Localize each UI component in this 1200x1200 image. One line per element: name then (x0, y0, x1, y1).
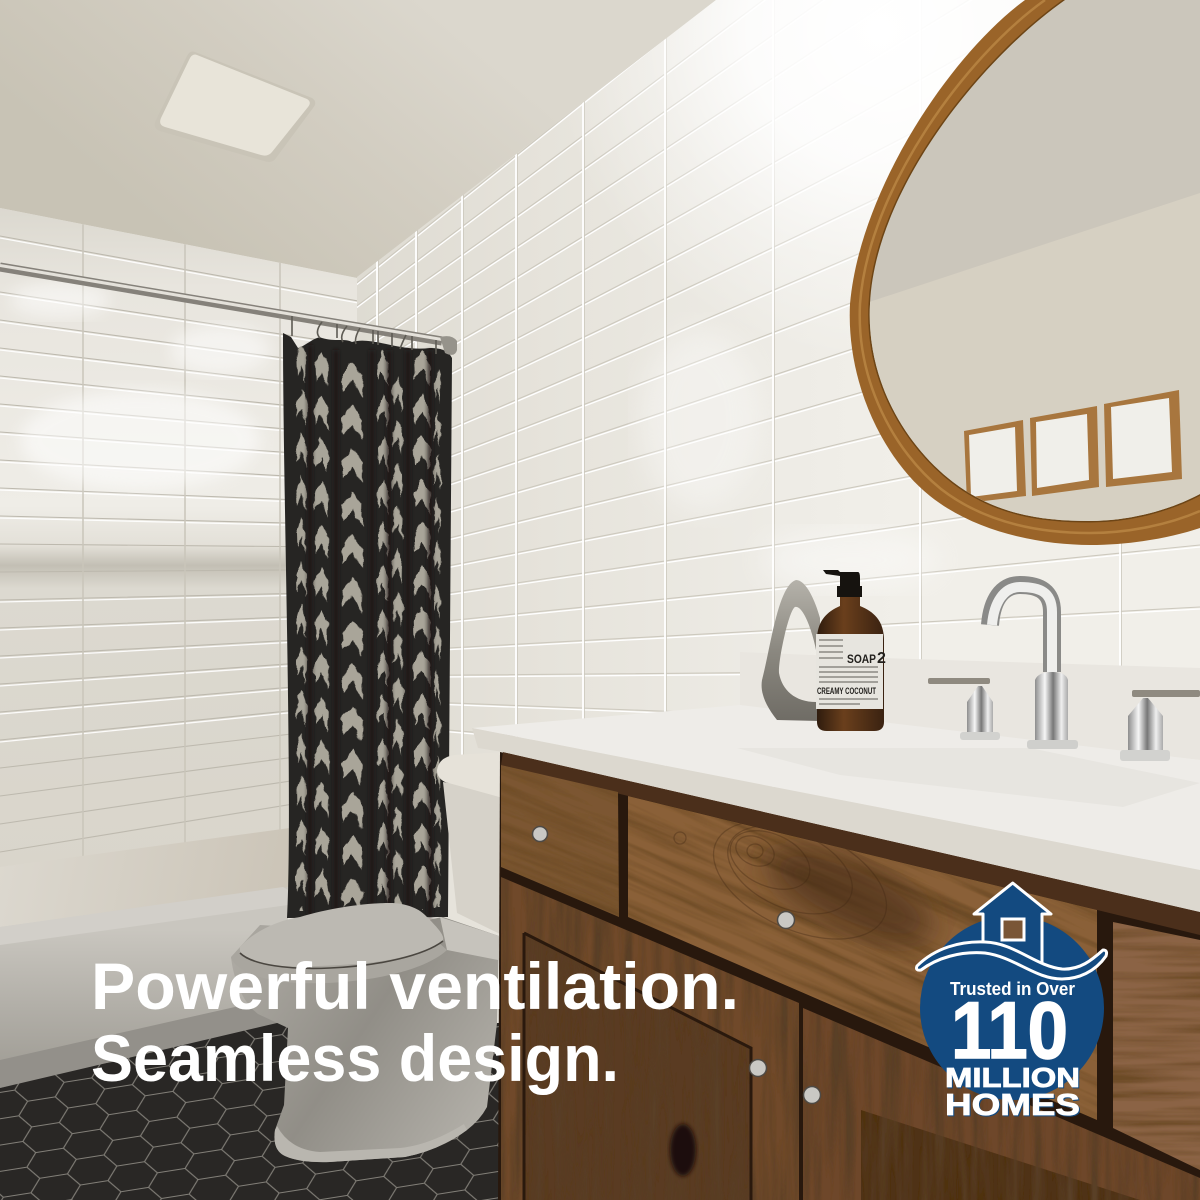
soap label: SOAP (847, 652, 876, 666)
soap bottle (816, 570, 886, 731)
mirror reflection (860, 0, 1200, 535)
left faucet handle (928, 678, 1000, 740)
side panel (1113, 922, 1200, 1170)
right faucet handle (1120, 690, 1200, 761)
soap label (816, 634, 886, 709)
badge text: homes: HOMES (945, 1087, 1080, 1122)
headline line two: Seamless design. (91, 1021, 619, 1095)
vanity cabinet (498, 752, 1200, 1200)
bathtub (0, 828, 290, 1088)
side wall tiles (357, 0, 1200, 787)
toilet lid (240, 903, 443, 966)
toilet bowl (231, 917, 499, 1162)
ceiling (0, 0, 716, 278)
soap label: CREAMY COCONUT (817, 686, 876, 696)
shower curtain (283, 333, 452, 918)
door left recessed panel (526, 936, 750, 1200)
drawer large (628, 796, 1097, 1120)
shower rod (0, 266, 457, 355)
vanity backsplash (740, 652, 1200, 760)
trust badge (916, 883, 1107, 1122)
door left (501, 877, 799, 1200)
hexagon floor tiles (0, 1023, 500, 1200)
headline (91, 949, 739, 1095)
marble sculpture (762, 580, 820, 721)
badge text: trusted in over: Trusted in Over (950, 979, 1075, 999)
badge text: 110: 110 (951, 986, 1068, 1076)
door right recessed panel (861, 1110, 1140, 1200)
wood knot rings (674, 824, 887, 940)
toilet seat rim (231, 925, 447, 983)
cabinet knobs (532, 826, 820, 1104)
back wall tiles (0, 200, 360, 880)
reflected picture frames (964, 390, 1182, 503)
ceiling ventilation fan (155, 52, 315, 162)
curtain chevron pattern (296, 346, 441, 911)
drawer left (501, 765, 619, 917)
door right (803, 1008, 1200, 1200)
headline line one: Powerful ventilation. (91, 949, 739, 1023)
badge blue circle (920, 916, 1104, 1100)
toilet tank (437, 752, 503, 934)
curtain rings (292, 316, 436, 354)
chrome faucet spout (990, 585, 1078, 749)
toilet (231, 752, 503, 1162)
sink basin (737, 748, 1200, 807)
quartz countertop (472, 705, 1200, 912)
badge text: million: MILLION (945, 1062, 1080, 1093)
soap label: 2 (877, 650, 886, 667)
upper rail (501, 752, 1200, 935)
icon: house (974, 883, 1051, 972)
round wood mirror (850, 0, 1200, 545)
icon: wave (916, 942, 1107, 979)
